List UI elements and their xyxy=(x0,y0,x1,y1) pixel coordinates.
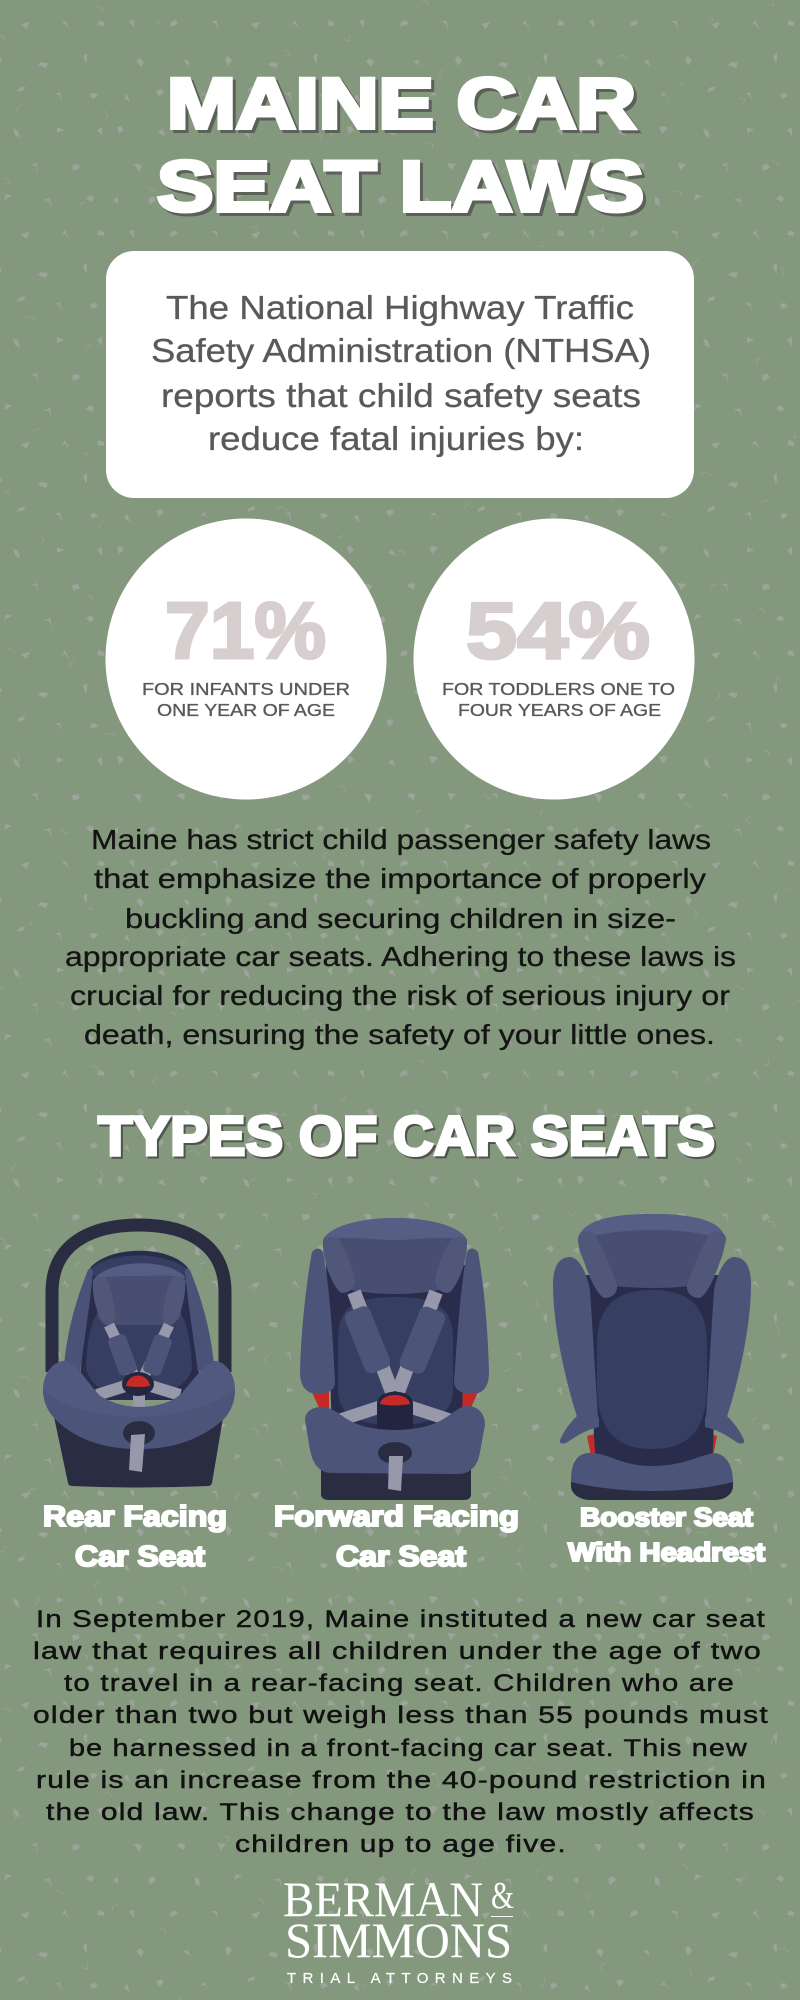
heading: types of car seats: TYPES OF CAR SEATS xyxy=(98,1104,715,1167)
buckle xyxy=(377,1392,413,1432)
law paragraph: law that requires all children under the age of two xyxy=(33,1638,762,1665)
strap pads xyxy=(107,1333,138,1377)
head pads xyxy=(578,1232,617,1298)
red side straps xyxy=(587,1433,601,1456)
back shell xyxy=(326,1265,465,1430)
law paragraph: the old law. This change to the law mostly affects xyxy=(46,1799,755,1826)
headrest xyxy=(323,1218,467,1294)
label: rear facing: Rear Facing xyxy=(43,1501,227,1533)
stat circle: 71%: FOR INFANTS UNDER xyxy=(142,679,350,699)
head pads xyxy=(93,1276,115,1324)
seat labels xyxy=(43,1501,765,1573)
panel: intro card xyxy=(106,251,694,498)
stat circle: 54% xyxy=(414,518,694,800)
law paragraph: to travel in a rear-facing seat. Children who are xyxy=(64,1670,735,1697)
strap pads xyxy=(343,1304,392,1375)
headrest xyxy=(578,1214,725,1288)
handle xyxy=(52,1225,225,1372)
icon: rear facing car seat xyxy=(43,1225,235,1488)
title xyxy=(157,65,644,227)
logo: Berman & Simmons: TRIAL ATTORNEYS xyxy=(287,1970,512,1987)
side wings xyxy=(553,1257,598,1424)
seat cushion back xyxy=(597,1290,707,1449)
label: booster seat xyxy=(568,1502,765,1567)
harness straps xyxy=(109,1325,169,1378)
label: forward facing: Car Seat xyxy=(336,1541,466,1573)
intro text xyxy=(151,289,651,457)
base xyxy=(321,1465,471,1500)
law paragraph: be harnessed in a front-facing car seat. This new xyxy=(69,1735,748,1762)
stat circle: 71%: ONE YEAR OF AGE xyxy=(157,700,335,720)
base xyxy=(53,1412,224,1488)
stat circle: 54%: FOUR YEARS OF AGE xyxy=(458,700,661,720)
icon: forward facing car seat xyxy=(300,1218,489,1500)
body paragraph: buckling and securing children in size- xyxy=(125,903,676,934)
body paragraph: Maine has strict child passenger safety laws xyxy=(91,824,711,855)
side wings xyxy=(300,1248,335,1394)
latch and strap xyxy=(378,1442,412,1464)
intro text: reports that child safety seats xyxy=(161,377,641,414)
stat circle: 54%: 54% xyxy=(466,586,650,675)
body paragraph: that emphasize the importance of properly xyxy=(94,863,706,894)
stat circle: 54%: FOR TODDLERS ONE TO xyxy=(442,679,675,699)
law paragraph: children up to age five. xyxy=(235,1831,567,1858)
stat circle: 71%: 71% xyxy=(165,586,326,675)
side wings xyxy=(64,1268,93,1372)
intro text: The National Highway Traffic xyxy=(166,289,634,326)
label: rear facing xyxy=(43,1501,227,1573)
body paragraph: death, ensuring the safety of your little ones. xyxy=(84,1019,715,1050)
icon: booster seat with headrest xyxy=(553,1214,751,1500)
intro text: reduce fatal injuries by: xyxy=(208,420,584,457)
stat circle: 71% xyxy=(106,518,386,800)
label: rear facing: Car Seat xyxy=(75,1541,205,1573)
body paragraph: crucial for reducing the risk of serious injury or xyxy=(70,980,730,1011)
logo: Berman & Simmons: BERMAN xyxy=(283,1871,483,1927)
harness straps xyxy=(354,1292,436,1392)
head pads xyxy=(323,1237,355,1293)
red side straps xyxy=(311,1390,329,1412)
buckle xyxy=(122,1372,154,1396)
armrests xyxy=(560,1410,599,1444)
law paragraph xyxy=(33,1606,769,1858)
law paragraph: In September 2019, Maine instituted a new car seat xyxy=(36,1606,766,1633)
front bumper xyxy=(43,1361,235,1449)
headrest xyxy=(93,1266,186,1325)
logo: Berman & Simmons: & xyxy=(491,1875,514,1917)
law paragraph: older than two but weigh less than 55 pounds must xyxy=(33,1702,769,1729)
label: booster seat: Booster Seat xyxy=(580,1502,753,1532)
intro text: Safety Administration (NTHSA) xyxy=(151,332,651,369)
label: booster seat: With Headrest xyxy=(568,1537,765,1567)
booster base xyxy=(571,1482,733,1500)
logo: Berman & Simmons xyxy=(283,1871,514,1987)
latch and strap xyxy=(123,1421,155,1445)
bumper xyxy=(305,1406,485,1474)
title: MAINE CAR xyxy=(167,65,636,144)
law paragraph: rule is an increase from the 40-pound restriction in xyxy=(36,1767,767,1794)
title: SEAT LAWS xyxy=(157,148,644,227)
body paragraph: appropriate car seats. Adhering to these laws is xyxy=(65,941,736,972)
shell xyxy=(78,1251,202,1400)
label: forward facing xyxy=(274,1501,519,1573)
back shell xyxy=(585,1275,720,1470)
body paragraph xyxy=(65,824,736,1050)
label: forward facing: Forward Facing xyxy=(274,1501,519,1533)
logo: Berman & Simmons: SIMMONS xyxy=(285,1912,512,1968)
